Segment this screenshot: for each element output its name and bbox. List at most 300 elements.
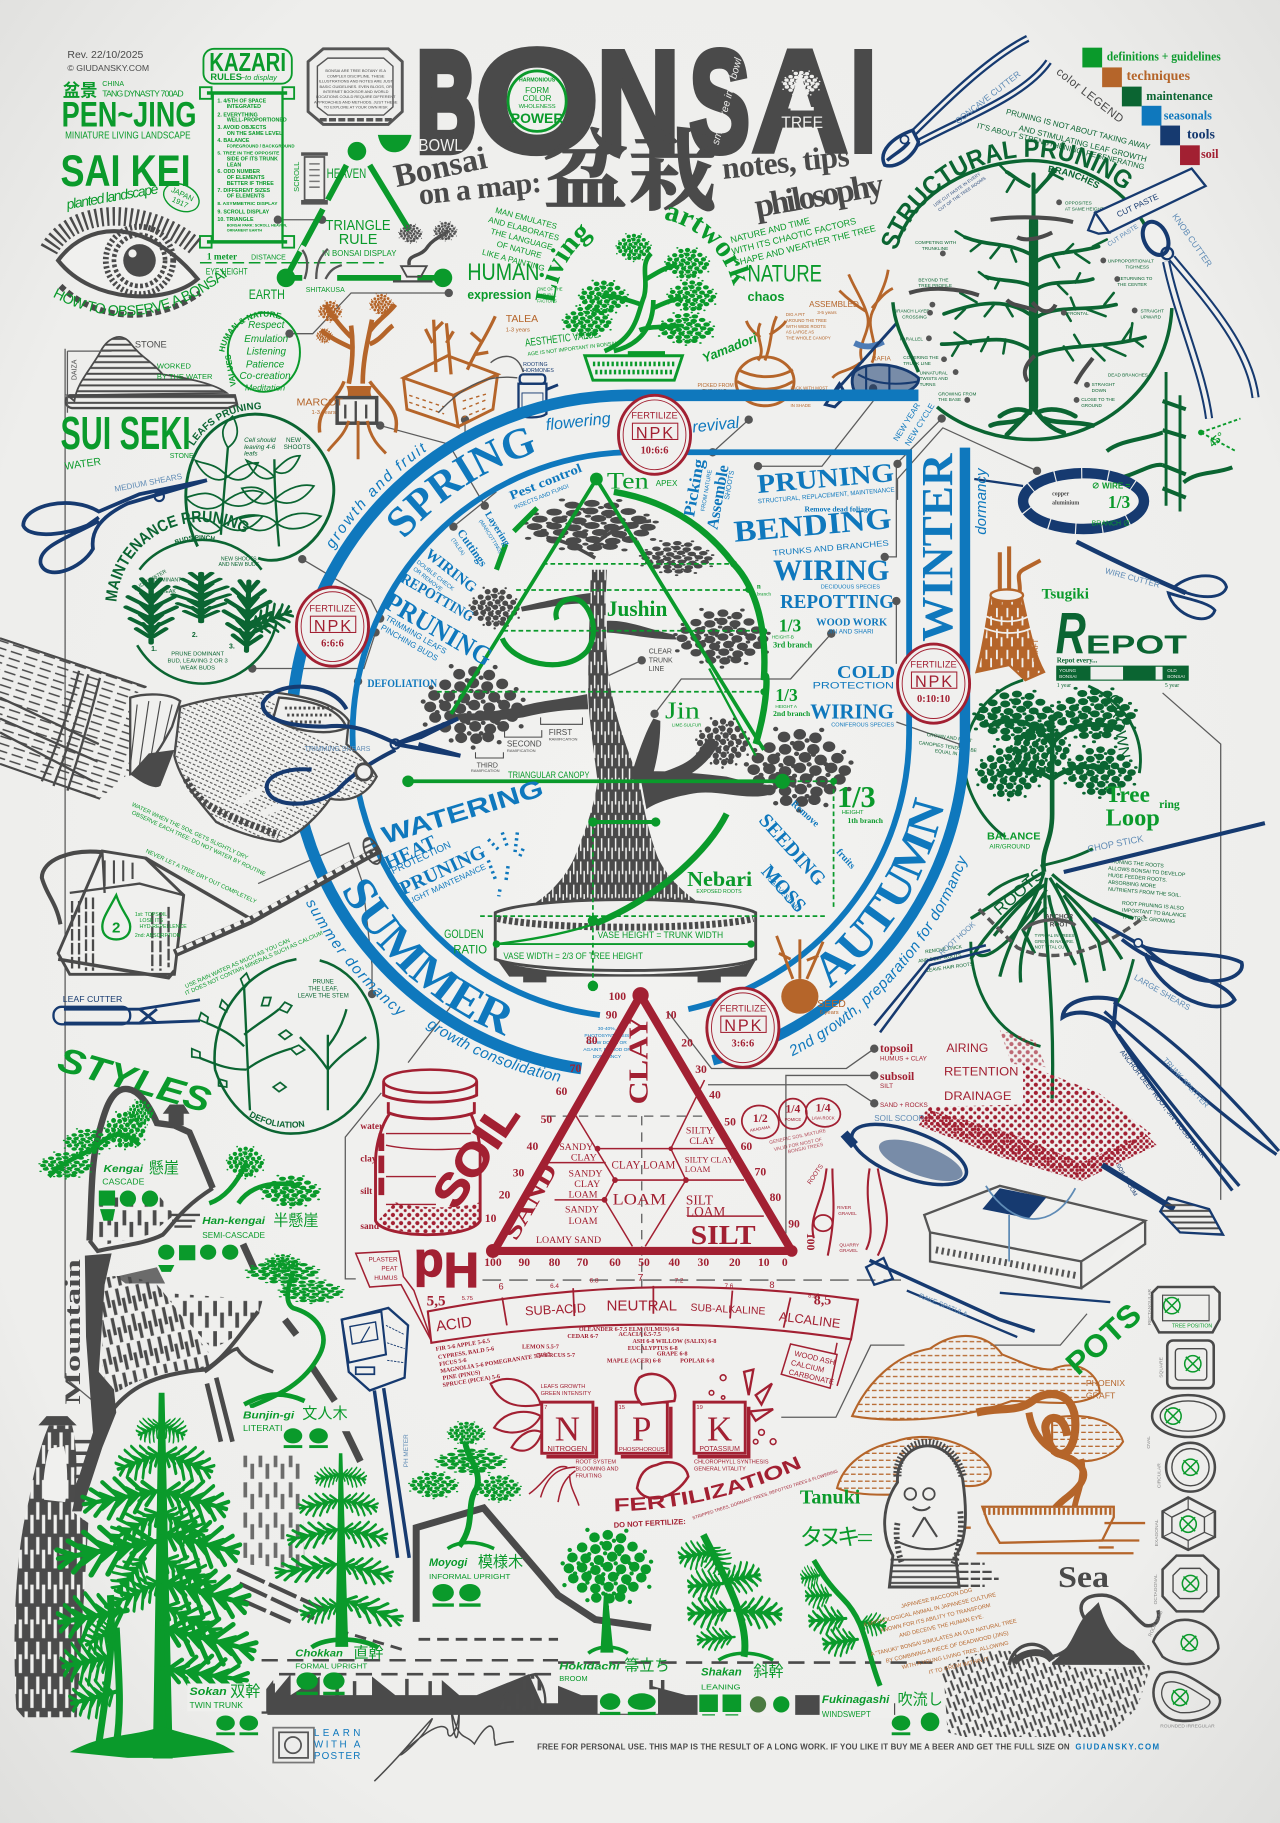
soil mixture stones: 1/2: [753, 1112, 768, 1125]
soil triangle: LOAM: [569, 1216, 598, 1227]
ph scale band: 7.2: [675, 1277, 684, 1284]
structural pruning panel: STRAIGHT: [1140, 309, 1164, 314]
crown and roots tree: TYPICAL IN TREES: [1035, 933, 1074, 938]
seasonal labels left: (TALEA): [449, 537, 466, 557]
yamadori: [698, 312, 831, 408]
nature chaos: NATURE: [748, 260, 822, 287]
structural pruning panel: STRUCTURAL PRUNING: [882, 139, 1132, 249]
eye: [49, 216, 200, 315]
ph scale band: ACID: [435, 1313, 473, 1335]
npk leaf and notes: [491, 1370, 776, 1506]
ph scale band: NEUTRAL: [606, 1297, 677, 1314]
repot: BONSAI: [1059, 674, 1077, 679]
values circle: HUMAN & NATURE: [218, 311, 282, 352]
kazari scroll: 9. SCROLL DISPLAY: [217, 209, 270, 215]
crown and roots tree: AND DEEP ROOTS,: [918, 952, 963, 965]
stamp: fertilize 10:6:6: FERTILIZE: [631, 411, 678, 421]
seasonal labels left: MOSS: [757, 861, 810, 917]
seasonal labels right: DECIDUOUS SPECIES: [821, 584, 880, 590]
shitakusa plant: [302, 249, 342, 279]
yamadori: 3-5 years: [706, 395, 728, 401]
structural pruning panel: UNPROPORTIONALT: [1108, 259, 1154, 264]
crown and roots tree: EQUAL IN SIZE: [934, 748, 970, 759]
phoenix graft tree: GRAFT: [1086, 1391, 1116, 1401]
ph scale band: SUB-ALKALINE: [690, 1303, 766, 1318]
repot: YOUNG: [1059, 668, 1077, 673]
yamadori: DIG A PIT: [786, 312, 805, 317]
geometry labels: [444, 468, 884, 961]
nature note: WITH ITS CHAOTIC FACTORS: [730, 216, 857, 257]
maintenance pruning circle: MAINTENANCE PRUNING: [105, 510, 248, 602]
sui seki heading: [60, 407, 194, 473]
geometry labels: Nebari: [687, 867, 752, 891]
badge in the O: POWER: [511, 110, 563, 126]
crown and roots tree: THE TREE GROWING: [1122, 914, 1175, 925]
concave cutter tool: [883, 38, 1049, 166]
species ph list: CEDAR 6-7: [567, 1334, 598, 1340]
defoliation circle: LEAVE THE STEM: [298, 994, 349, 1000]
kazari scroll: 1. 4/5TH OF SPACE: [217, 98, 267, 104]
soil jar: water: [360, 1122, 383, 1132]
leafs pruning circle: LEAFS PRUNING: [188, 402, 261, 446]
seasonal labels left: 30-40%,: [598, 1026, 616, 1032]
seasonal labels left: PINCHING BUDS: [379, 623, 440, 663]
crown and roots tree: CROWN AND ROOT: [926, 732, 972, 744]
kazari badge: [203, 49, 292, 84]
structural pruning panel: GROWING FROM: [938, 391, 976, 396]
plaster tag: [356, 1251, 432, 1343]
tree annotation labels: RAMIFICATION: [507, 748, 536, 753]
repot: 1 year: [1057, 683, 1071, 689]
values circle: VALUES: [223, 353, 238, 387]
learn with a poster logo: LEARN: [314, 1728, 360, 1739]
crown and roots tree: CROWN: [1105, 693, 1133, 760]
root hook: [874, 920, 991, 1032]
ph scale band: 8,5: [814, 1293, 831, 1308]
talea box: 1-3 years: [506, 327, 530, 333]
crown and roots tree: ROOTS: [990, 865, 1048, 919]
soil mixture stones: [738, 1095, 844, 1155]
soil jar: sand: [360, 1222, 380, 1232]
geometry labels: EXPOSED ROOTS: [696, 889, 742, 895]
stamp: fertilize 6:6:6: NPK: [314, 617, 351, 635]
stamp: fertilize 10:6:6: 10:6:6: [641, 445, 668, 456]
marcot orange tree: [296, 294, 396, 459]
maintenance pruning circle: PRUNE DOMINANT: [171, 652, 225, 658]
crown and roots tree: Tree: [1106, 782, 1150, 808]
soil jar: clay: [360, 1154, 377, 1164]
style: hokidachi: Hokidachi: [559, 1662, 621, 1673]
style: han-kengai: SEMI-CASCADE: [202, 1230, 265, 1240]
style: kengai: 懸崖: [149, 1160, 179, 1177]
geometry labels: 2nd branch: [773, 709, 811, 718]
geometry dots: [402, 473, 837, 991]
hand and sleeve: [0, 638, 377, 842]
stamp: fertilize 6:6:6: [296, 587, 369, 666]
man emulates note: MAN EMULATES: [494, 206, 559, 231]
structural pruning panel: [882, 139, 1174, 442]
style: bunjin-gi: Bunjin-gi: [243, 1410, 295, 1421]
soil triangle: 40: [709, 1089, 721, 1102]
structural pruning panel: AT SAME HEIGHT: [1065, 206, 1104, 211]
plaster tag: PEAT: [381, 1266, 398, 1273]
phoenix graft tree: [837, 1336, 1145, 1553]
tanuki note: AND DECEIVE THE HUMAN EYE.: [899, 1614, 985, 1639]
large shears: [1093, 918, 1242, 1013]
soil triangle: 10: [665, 1008, 677, 1021]
soil layers: DRAINAGE: [944, 1090, 1012, 1103]
title: BONSAI: [417, 17, 877, 184]
subtitle right: [720, 138, 887, 225]
knob cutter: [1138, 212, 1256, 419]
soil triangle: CLAY: [624, 1016, 655, 1104]
soil mixture stones: LAVA ROCK: [812, 1116, 835, 1121]
pot labels: OCTAGONAL: [1153, 1574, 1159, 1604]
npk leaf and notes: CHLOROPHYLL SYNTHESIS: [694, 1460, 769, 1466]
soil triangle: LOAM: [613, 1190, 666, 1208]
seed: SEED: [817, 999, 846, 1010]
structural pruning panel: CROSSING: [902, 315, 927, 320]
legend: definitions + guidelines: [1107, 49, 1221, 63]
ph heading: H: [444, 1244, 479, 1298]
tree annotation labels: RAMIFICATION: [549, 737, 578, 742]
seasonal labels left: PRUNING: [396, 841, 489, 900]
medium shears: MEDIUM SHEARS: [114, 472, 183, 494]
phoenix graft tree: PHOENIX: [1086, 1378, 1125, 1388]
crown and roots tree: REMOVE THICK: [925, 944, 963, 955]
seasonal arc notes: growth consolidation: [426, 1021, 560, 1082]
seasonal labels right: CONIFEROUS SPECIES: [831, 723, 894, 729]
crown and roots tree: ROOT: [1050, 922, 1068, 929]
saikei heading: planted landscape: [64, 180, 160, 212]
tree in the A: TREE: [781, 114, 823, 132]
geometry labels: VASE HEIGHT = TRUNK WIDTH: [598, 930, 723, 940]
style: fukinagashi: 吹流し: [898, 1691, 943, 1708]
chop stick: CHOP STICK: [1087, 833, 1145, 854]
tanuki note: [863, 1588, 1018, 1676]
scroll icon: SCROLL: [292, 162, 301, 192]
wired tree: 45°: [1206, 429, 1227, 450]
stamp: fertilize 3:6:6: NPK: [724, 1017, 762, 1035]
soil triangle: 30: [513, 1167, 525, 1180]
seasonal labels right: STRUCTURAL, REPLACEMENT, MAINTENANCE: [758, 486, 895, 505]
soil triangle: LOAM: [685, 1164, 711, 1174]
style: chokkan: 直幹: [353, 1645, 384, 1662]
species ph list: MAGNOLIA 5-6 POMEGRANATE 5.5-6.5: [440, 1352, 551, 1375]
moyogi hill: [416, 1508, 651, 1628]
soil layers: AIRING: [946, 1042, 988, 1055]
kazari scroll: SIDE OF ITS TRUNK: [227, 156, 278, 162]
style: sokan big conifer: 双幹: [230, 1683, 260, 1700]
soil triangle: SAND: [499, 1159, 563, 1245]
crown and roots tree: ROOT PRUNING IS ALSO: [1122, 901, 1184, 912]
structural pruning panel: PARALLEL: [900, 337, 923, 342]
legend: seasonals: [1164, 109, 1212, 123]
suiseki stone: STONE: [135, 340, 167, 350]
npk elements: [542, 1402, 749, 1457]
watering spray: [488, 832, 523, 896]
seasonal labels left: WATERING: [379, 775, 547, 850]
style: shakan: LEANING: [701, 1682, 741, 1691]
medium shears: [23, 472, 207, 572]
seasonal labels left: (MARCOTTING): [477, 519, 503, 555]
fertilization heading: STRIPPED TREES, DORMANT TREES, REPOTTED TREES & FLOWERING: [692, 1468, 839, 1521]
trunk splitter: [1063, 998, 1279, 1191]
yamadori: AROUND THE TREE: [786, 318, 827, 323]
soil triangle: 60: [741, 1140, 752, 1153]
central bonsai tree: [423, 500, 851, 905]
tsugiki graft: Tsugiki: [1042, 587, 1089, 603]
maintenance pruning circle: 3.: [229, 644, 235, 651]
plaque: TO EXPLORE AT YOUR OWN RISK: [324, 105, 388, 110]
learn with a poster logo: POSTER: [314, 1751, 360, 1762]
seasonal labels left: SLOW DOWN OR: [587, 1040, 627, 1046]
subtitle left: Bonsai: [391, 140, 490, 195]
kanji title: 盆栽: [542, 124, 716, 222]
plaque: ILLUSTRATIONS AND NOTES ARE JUST: [319, 79, 393, 84]
soil mixture stones: BONSAI TREES: [787, 1142, 825, 1155]
root hook: ROOT HOOK: [937, 920, 977, 957]
ph meter: PH METER: [403, 1434, 410, 1467]
triangle rule: EYE HEIGHT: [206, 266, 248, 276]
plaque: INTERNET BOOKSOR AND WORLD: [323, 89, 389, 94]
saikei heading: [60, 147, 204, 217]
nature note: NATURE AND TIME: [729, 215, 811, 245]
maintenance pruning circle: AND NEW BUDS: [219, 562, 260, 568]
seasonal labels right: Remove dead foliage: [805, 505, 872, 514]
revision note: © GIUDANSKY.COM: [67, 63, 149, 73]
seasonal labels right: WOOD WORK: [816, 617, 888, 628]
ph scale band: 8: [769, 1280, 775, 1290]
crown and roots tree: ALLOWS BONSAI TO DEVELOP: [1108, 866, 1186, 878]
seasonal labels right: PRUNING: [756, 457, 895, 499]
tanuki label: Tanuki: [800, 1486, 861, 1508]
watering can: [42, 802, 384, 997]
soil triangle: 40: [668, 1256, 680, 1269]
fertilization heading: DO NOT FERTILIZE:: [613, 1517, 686, 1530]
repot: [1056, 601, 1188, 689]
style: kengai: Kengai: [103, 1164, 144, 1175]
geometry labels: APEX: [656, 479, 678, 488]
crown and roots tree: GREW IN NATURE.: [1035, 939, 1074, 944]
stamp: fertilize 0:10:10: NPK: [915, 673, 952, 691]
pot labels: RECTANGULAR: [1147, 1288, 1153, 1325]
watering can: USE RAIN WATER AS MUCH AS YOU CAN: [184, 938, 291, 990]
seasonal arc notes: growth and fruit: [328, 442, 426, 550]
soil heading: SOIL: [423, 1093, 529, 1217]
learn with a poster logo: WITH A: [314, 1739, 361, 1750]
style: shakan: [677, 1535, 795, 1716]
human expression: NATURAL: [537, 292, 557, 297]
penjing heading: TANG DYNASTY 700AD: [102, 88, 184, 98]
structural pruning panel: UPWARD: [1140, 315, 1162, 320]
soil triangle: CLAY: [571, 1152, 597, 1163]
trimming shears: [263, 687, 460, 804]
soil triangle: 60: [609, 1256, 621, 1269]
style: fukinagashi: WINDSWEPT: [822, 1710, 871, 1719]
aesthetic value: [524, 328, 617, 358]
style: shakan: 斜幹: [753, 1664, 784, 1681]
legend: [1054, 48, 1221, 165]
npk leaf and notes: BLOOMING AND: [575, 1467, 619, 1473]
soil layers: RETENTION: [944, 1065, 1018, 1078]
nature chaos: chaos: [748, 289, 784, 304]
stamp: fertilize 3:6:6: [707, 988, 779, 1067]
style: chokkan: FORMAL UPRIGHT: [295, 1661, 368, 1670]
npk elements: N: [555, 1409, 580, 1448]
geometry labels: VASE WIDTH = 2/3 OF TREE HEIGHT: [503, 951, 643, 961]
seasonal labels left: TRIMMING LEAFS: [384, 614, 449, 656]
style: chokkan: [274, 1453, 405, 1695]
repot: EPOT: [1086, 631, 1188, 659]
seasonal labels left: PROTECTION: [390, 840, 453, 877]
ground and river: [262, 1630, 942, 1715]
seasonal labels left: Remove: [789, 799, 822, 830]
season: autumn: AUTUMN: [820, 796, 944, 988]
crown and roots tree: NUTRIENTS FROM THE SOIL.: [1108, 887, 1181, 899]
plaque: [308, 49, 402, 124]
suiseki stone: BY THE WATER: [157, 372, 213, 381]
kazari scroll: 8. ASYMMETRIC DISPLAY: [217, 201, 278, 207]
leafs pruning circle: leafs: [244, 451, 258, 458]
geometry labels: Jin: [665, 698, 700, 725]
npk elements: 15: [618, 1405, 625, 1411]
structural pruning panel: COMPETING WITH: [915, 240, 956, 245]
legend: soil: [1201, 147, 1219, 161]
leafs pruning circle: Cell should: [244, 437, 276, 444]
suiseki stone: WORKED: [157, 362, 191, 371]
man emulates note: THE LANGUAGE: [490, 227, 554, 252]
rake spatula: RAKE SPATULA: [918, 1293, 969, 1319]
trunk splitter: TRUNK SPLITTER: [1161, 1056, 1211, 1110]
species ph list: ACACIA 6.5-7.5: [618, 1332, 661, 1338]
saikei heading: SAI KEI: [60, 147, 191, 196]
tanuki note: A MYTHOLOGICAL ANIMAL IN JAPANESE CULTURE: [863, 1592, 997, 1629]
kazari badge: ~to display: [241, 73, 278, 82]
defoliation circle: [190, 958, 380, 1135]
soil triangle: LOAM: [569, 1190, 598, 1201]
seasonal labels left: DOUBLE CHECK: [415, 560, 455, 593]
soil broom: SOIL BROOM: [1114, 1163, 1138, 1198]
structural pruning panel: TURNS: [920, 382, 936, 387]
assembled tree: [809, 270, 893, 378]
watering can: NEVER LET A TREE DRY OUT COMPLETELY: [144, 849, 257, 905]
seasonal arc notes: 2nd growth, preparation for dormancy: [790, 855, 968, 1056]
large shears: LARGE SHEARS: [1133, 973, 1192, 1013]
geometry labels: 1/3: [779, 615, 801, 635]
triangle rule: 1 meter: [207, 252, 237, 262]
tanuki note: WITH A YOUNG LIVING TREE, ALLOWING: [902, 1641, 1009, 1671]
geometry labels: GOLDEN: [444, 928, 484, 941]
pots column: [1152, 1287, 1224, 1721]
style: bunjin-gi: LITERATI: [243, 1424, 283, 1433]
wire coil: BRANCH ∅: [1092, 520, 1130, 528]
soil scoop: SOIL SCOOP: [874, 1114, 924, 1123]
npk elements: 7: [544, 1405, 547, 1411]
stamp: fertilize 0:10:10: [898, 644, 970, 723]
soil scoop: [844, 1112, 974, 1197]
nature note: SHAPE AND WEATHER THE TREE: [733, 223, 877, 268]
tree annotation labels: RAMIFICATION: [471, 768, 500, 773]
small roots illustrations: GRAVEL: [838, 1211, 857, 1216]
structural pruning panel: THE BASE: [938, 397, 961, 402]
structural pruning panel: THE CENTER: [1117, 282, 1148, 287]
kazari scroll: BONSAI PARK: SCROLL HEAVEN,: [227, 224, 287, 228]
style: hokidachi: BROOM: [559, 1674, 588, 1683]
wheel rings: [291, 395, 965, 1068]
tree annotation labels: LINE: [649, 666, 665, 673]
style: bunjin-gi: [241, 1254, 355, 1448]
yamadori: KEEP TREE: [791, 397, 815, 402]
ph heading: p: [414, 1234, 444, 1288]
soil triangle: 50: [541, 1113, 552, 1126]
structural pruning panel: RETURNING TO: [1117, 276, 1153, 281]
style: chokkan: Chokkan: [295, 1649, 343, 1660]
small roots illustrations: QUARRY: [839, 1242, 859, 1247]
crown and roots tree: NOT VITAL CUT: [1035, 945, 1067, 950]
subtitle left: [391, 140, 543, 212]
badge in the O: WHOLENESS: [519, 104, 556, 110]
rooting jar: HORMONES: [523, 368, 554, 374]
npk elements: PHOSPHOROUS: [619, 1447, 665, 1453]
small roots illustrations: GRAVEL: [839, 1248, 858, 1253]
assembled tree: ASSEMBLED: [809, 300, 859, 309]
pots heading: POTS: [1059, 1297, 1148, 1382]
kazari scroll: 2. EVERYTHING: [217, 112, 258, 118]
soil triangle: 20: [499, 1189, 511, 1202]
title: BONSAI: A: [750, 17, 850, 184]
tree annotation labels: THIRD: [477, 762, 498, 769]
soil triangle: 100: [484, 1256, 502, 1269]
stamp: fertilize 10:6:6: NPK: [636, 424, 673, 442]
kazari scroll: 10. TRIANGLE: [217, 217, 254, 223]
pot labels: SQUARE: [1159, 1356, 1165, 1378]
small roots illustrations: RIVER: [837, 1205, 852, 1210]
watering can: 1st: TOPSOIL: [135, 912, 167, 918]
soil triangle: 50: [638, 1256, 650, 1269]
geometry labels: Jushin: [607, 596, 667, 621]
man emulates note: LIKE A PAINTING: [481, 248, 546, 273]
soil mixture stones: 1/4: [785, 1103, 800, 1116]
soil triangle: 90: [606, 1008, 618, 1021]
crown and roots tree: PRUNING THE ROOTS: [1108, 859, 1164, 870]
pot labels: EXAGONAL: [1154, 1519, 1160, 1546]
footer note: FREE FOR PERSONAL USE. THIS MAP IS THE RESULT OF A LONG WORK. IF YOU LIKE IT BUY ME A BEER AND GET THE FULL SIZE ON: [537, 1743, 1070, 1752]
legend: color LEGEND: [1054, 65, 1126, 126]
repot: BONSAI: [1167, 674, 1185, 679]
pot labels: OVAL: [1146, 1436, 1152, 1449]
seasonal labels right: SHOOTS: [724, 470, 736, 500]
crown and roots tree: LEAVE HAIR ROOTS: [926, 961, 974, 974]
seasonal labels left: LIGHT MAINTENANCE: [406, 862, 488, 906]
watering can: 2: [112, 919, 120, 936]
seasonal labels right: Assemble: [704, 464, 733, 531]
seasonal arc notes: flowering: [545, 409, 612, 434]
seasonal labels left: PHOTOSYNTHESIS: [584, 1033, 630, 1039]
soil triangle: LOAMY SAND: [536, 1235, 601, 1246]
geometry labels: HEIGHT A: [775, 704, 798, 709]
golden spiral and geometry: [408, 479, 834, 986]
display bonsai icon: [393, 222, 457, 281]
watering can: LOSE ITS: [140, 918, 164, 924]
living artwork arc: artwork: [665, 207, 749, 286]
ph scale band: 7.6: [724, 1283, 734, 1290]
tsugiki graft: [977, 546, 1089, 680]
assembled tree: 3-5 years: [817, 310, 837, 315]
soil triangle: 60: [556, 1085, 568, 1098]
crown and roots tree: Loop: [1106, 804, 1160, 831]
crown and roots tree: ANCHOR: [1045, 913, 1074, 920]
